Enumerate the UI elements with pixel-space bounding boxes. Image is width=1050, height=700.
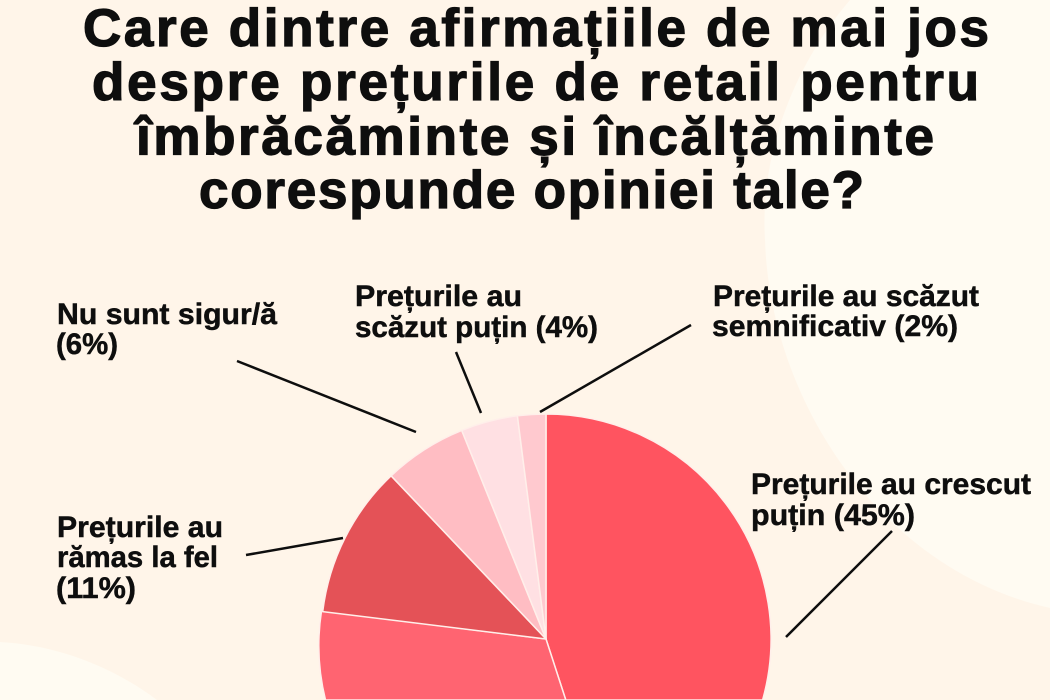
label: not sure xyxy=(56,298,277,361)
label: rose slightly: Prețurile au crescut xyxy=(751,468,1031,501)
label: fell slightly: Prețurile au xyxy=(355,280,522,313)
label: fell significantly xyxy=(712,280,979,343)
title: corespunde opiniei tale? xyxy=(199,161,864,220)
leader: fell significantly xyxy=(540,325,691,412)
label: rose slightly xyxy=(751,468,1031,532)
slice: fell significantly 2% xyxy=(517,414,546,639)
slice: unchanged 11% xyxy=(323,476,546,639)
leader: fell slightly xyxy=(456,352,481,413)
label: unchanged xyxy=(56,511,223,605)
label: fell slightly: scăzut puțin (4%) xyxy=(355,311,598,344)
slice: fell slightly 4% xyxy=(462,416,546,639)
label: not sure: Nu sunt sigur/ă xyxy=(57,298,277,331)
title: îmbrăcăminte și încălțăminte xyxy=(133,108,934,168)
pie chart xyxy=(319,414,771,700)
label: fell slightly xyxy=(355,280,598,344)
label: unchanged: Prețurile au xyxy=(57,511,223,544)
label: not sure: (6%) xyxy=(56,328,118,361)
slice: not sure 6% xyxy=(391,430,546,639)
label: unchanged: (11%) xyxy=(56,572,136,605)
slice: prices rose slightly 45% xyxy=(546,414,771,700)
label: fell significantly: Prețurile au scăzut xyxy=(713,280,979,313)
leader: unchanged xyxy=(246,538,343,555)
leader: rose slightly xyxy=(786,531,892,637)
leader lines xyxy=(237,325,892,637)
title: despre prețurile de retail pentru xyxy=(92,53,979,113)
label: unchanged: rămas la fel xyxy=(57,541,218,574)
title xyxy=(83,0,989,220)
leader: not sure xyxy=(237,361,416,432)
label: fell significantly: semnificativ (2%) xyxy=(712,310,958,343)
slice: 32% xyxy=(319,611,566,700)
title: Care dintre afirmațiile de mai jos xyxy=(83,0,989,59)
label: rose slightly: puțin (45%) xyxy=(751,499,915,532)
